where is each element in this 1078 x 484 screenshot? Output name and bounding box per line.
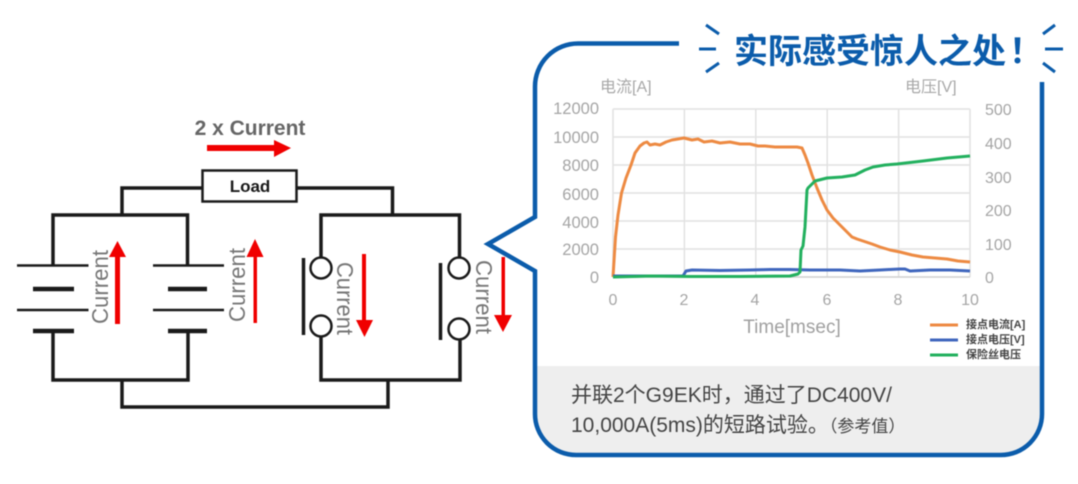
heading: 2 x Current: 2 x Current [195, 117, 305, 140]
left axis labels: 6000 [562, 186, 599, 204]
chart: current and voltage over time [553, 78, 1026, 361]
right axis labels [985, 102, 1012, 287]
x axis labels: 0 [609, 292, 618, 309]
legend [930, 317, 1026, 361]
panel: callout bubble [488, 25, 1063, 455]
left axis labels [553, 100, 599, 287]
arrow: load current [207, 140, 291, 157]
right axis labels: 100 [985, 237, 1012, 254]
series: fuse voltage [613, 156, 970, 277]
caption text [571, 384, 905, 437]
label: current 4: Current [471, 260, 497, 335]
label: current 2: Current [224, 247, 250, 322]
x axis labels: 8 [894, 292, 903, 309]
arrow: down 1 [356, 254, 373, 337]
series: contact voltage [613, 269, 970, 276]
arrow: up 2 [246, 239, 264, 323]
x axis labels: 6 [823, 292, 832, 309]
right axis labels: 0 [985, 270, 994, 287]
load box [202, 170, 296, 202]
icon: left sparks [699, 25, 719, 72]
switch 2 [440, 258, 470, 340]
arrow: up 1 [109, 241, 126, 324]
x axis title: Time[msec] [743, 317, 841, 338]
right axis labels: 500 [985, 102, 1012, 119]
bubble outline [488, 44, 1042, 455]
x axis labels [609, 292, 979, 309]
panel: circuit diagram [17, 117, 512, 407]
icon: right sparks [1043, 25, 1063, 72]
right axis labels: 200 [985, 203, 1012, 220]
caption text: 10,000A(5ms)的短路试验。（参考值） [571, 414, 905, 437]
arrow: down 2 [494, 257, 512, 332]
right axis labels: 300 [985, 170, 1012, 187]
legend: 接点电流[A] [966, 317, 1026, 331]
battery 2 [153, 266, 224, 331]
x axis labels: 2 [680, 292, 689, 309]
left axis labels: 8000 [562, 157, 599, 175]
load box: Load [230, 177, 270, 196]
caption text: 并联2个G9EK时，通过了DC400V/ [571, 384, 892, 407]
left axis labels: 12000 [553, 100, 599, 118]
series: contact current [613, 138, 970, 277]
label: current 3: Current [332, 262, 358, 336]
label: current 1: Current [87, 249, 113, 324]
wiring [53, 188, 460, 407]
caption background [537, 366, 1040, 454]
legend: 保险丝电压 [966, 347, 1021, 361]
left axis labels: 0 [590, 269, 599, 287]
left axis labels: 4000 [562, 214, 599, 232]
left axis labels: 2000 [562, 241, 599, 259]
right axis labels: 400 [985, 136, 1012, 153]
battery 1 [17, 266, 88, 331]
right axis title: 电压[V] [905, 78, 957, 96]
x axis labels: 10 [961, 292, 979, 309]
left axis labels: 10000 [553, 129, 599, 147]
title: 实际感受惊人之处！ [734, 33, 1043, 71]
switch 1 [304, 258, 332, 336]
legend: 接点电压[V] [966, 332, 1025, 346]
x axis labels: 4 [751, 292, 760, 309]
grid [613, 109, 970, 277]
left axis title: 电流[A] [600, 78, 652, 96]
